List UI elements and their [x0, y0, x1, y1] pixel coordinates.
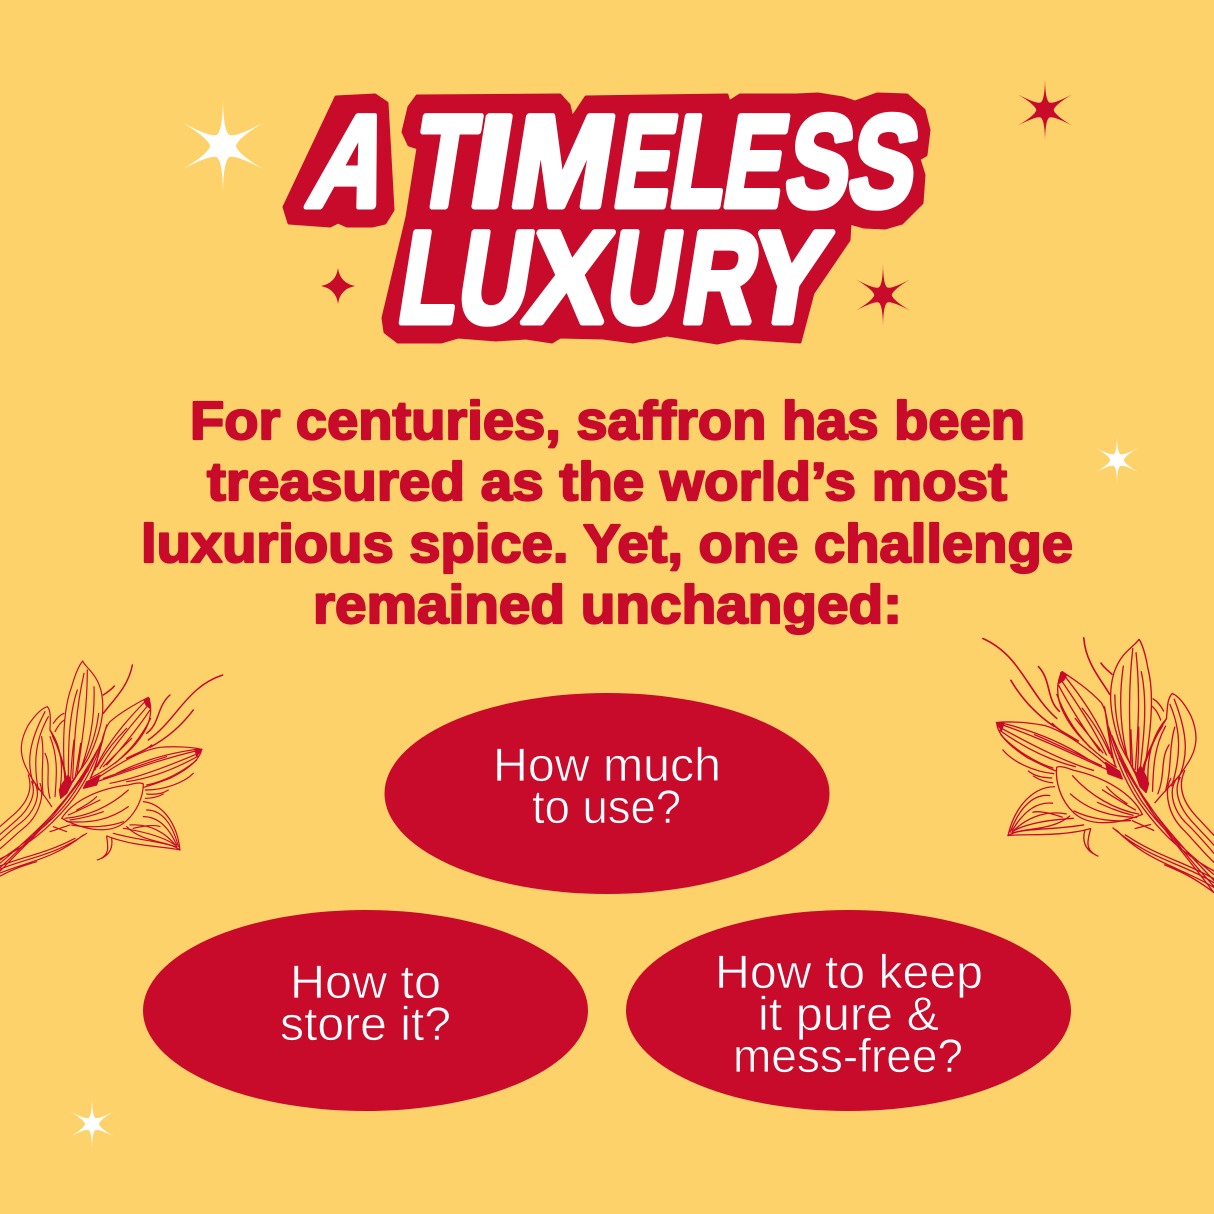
bubble: how much to use: How much: [493, 738, 721, 791]
bubble: how to store it: How to: [290, 955, 441, 1008]
sparkle: large white: [183, 100, 263, 192]
title line 1: S: [778, 89, 864, 234]
title outline backing: [284, 94, 929, 343]
icon: saffron flower left: [0, 661, 223, 882]
bubble: how much to use: [384, 693, 830, 894]
bubble: how much to use: to use?: [532, 780, 681, 833]
sparkle: red four point: [321, 268, 355, 304]
bubble: how to keep it pure and mess-free: How to keep: [715, 945, 983, 998]
title line 1: E: [607, 89, 686, 234]
intro text block: luxurious spice. Yet, one challenge: [141, 514, 1073, 574]
bubble: how to store it: store it?: [280, 997, 451, 1050]
title line 2: [391, 205, 839, 350]
title: a timeless luxury: [284, 89, 929, 350]
title line 1: I: [462, 89, 523, 234]
intro text block: remained unchanged:: [313, 575, 902, 635]
sparkle: white right: [1096, 436, 1138, 484]
title line 1: T: [406, 89, 487, 234]
sparkle: red below title: [856, 264, 910, 326]
sparkle: red top right: [1018, 79, 1072, 141]
intro text block: For centuries, saffron has been: [190, 391, 1025, 451]
title line 1: M: [503, 89, 625, 234]
intro text block: treasured as the world’s most: [207, 452, 1007, 512]
title line 2: U: [450, 205, 543, 350]
title line 1: L: [663, 89, 740, 234]
bubble: how to keep it pure and mess-free: [626, 910, 1071, 1111]
title line 1: A: [296, 89, 409, 234]
icon: saffron flower right: [957, 623, 1214, 892]
title line 2: R: [675, 205, 770, 350]
sparkle: white bottom left: [70, 1099, 114, 1149]
title line 2: U: [599, 205, 692, 350]
title line 2: L: [391, 205, 472, 350]
bubble: how to store it: [143, 910, 588, 1111]
intro text block: [141, 391, 1073, 635]
title line 2: X: [518, 205, 621, 350]
title line 1: S: [841, 89, 929, 234]
title line 1: E: [716, 89, 798, 234]
bubble: how to keep it pure and mess-free: mess-free?: [733, 1029, 963, 1082]
bubble: how to keep it pure and mess-free: it pure &: [758, 987, 939, 1040]
title line 2: Y: [741, 205, 839, 350]
title line 1: [296, 89, 929, 234]
